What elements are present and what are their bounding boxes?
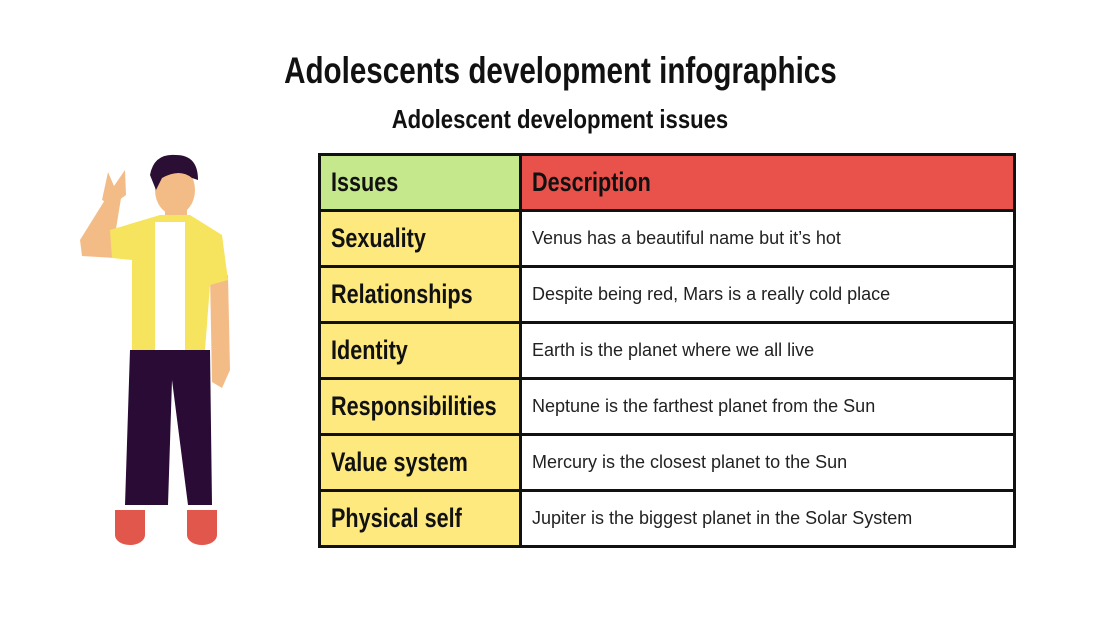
shirt [110,215,228,350]
table: issues and descriptions: Jupiter is the biggest planet in the Solar System [532,508,912,528]
shoes [115,510,217,545]
pants [125,350,212,505]
lower arm [210,275,230,388]
table: issues and descriptions: Mercury is the closest planet to the Sun [532,452,847,472]
table: issues and descriptions: Value system [331,447,468,477]
table: issues and descriptions: Description [532,167,651,197]
table: issues and descriptions: Earth is the planet where we all live [532,340,814,360]
table: issues and descriptions: Issues [331,167,398,197]
table: issues and descriptions [318,153,1016,548]
subtitle: Adolescent development issues [392,104,728,134]
raised arm [80,170,126,258]
table: issues and descriptions: Physical self [331,503,462,533]
table: issues and descriptions: Despite being red, Mars is a really cold place [532,284,890,304]
table: issues and descriptions: Neptune is the farthest planet from the Sun [532,396,875,416]
table: issues and descriptions: Responsibilities [331,391,497,421]
table: issues and descriptions: Relationships [331,279,473,309]
table: issues and descriptions: Identity [331,335,408,365]
illustration: waving teenager [80,154,230,545]
title: Adolescents development infographics [284,50,836,91]
head [150,155,198,225]
table: issues and descriptions: Venus has a beautiful name but it’s hot [532,228,841,248]
table: issues and descriptions: Sexuality [331,223,426,253]
